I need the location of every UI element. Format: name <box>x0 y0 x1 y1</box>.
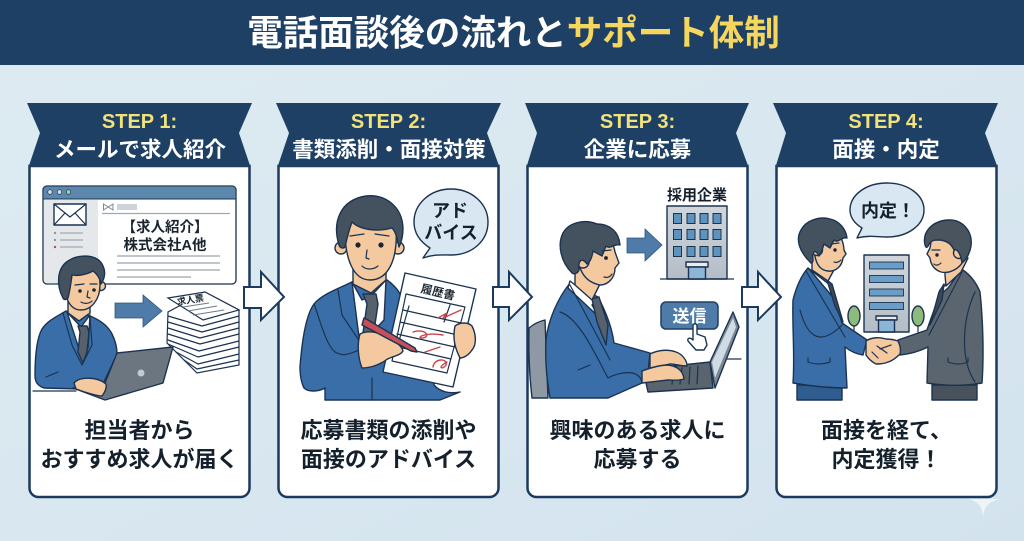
arrow: step 2 to 3 <box>493 272 532 320</box>
arrow: email to documents <box>115 295 162 327</box>
company building: 採用企業 <box>667 186 727 204</box>
caption <box>40 418 239 472</box>
caption <box>549 418 726 472</box>
step 2 banner <box>276 103 501 167</box>
panel: step 1 <box>27 103 252 497</box>
paper stack <box>167 292 239 373</box>
caption: 応募書類の添削や <box>300 418 477 443</box>
step 2 banner: STEP 2: <box>351 111 426 133</box>
person typing <box>546 222 741 398</box>
envelope icon <box>54 204 86 225</box>
office building and trees <box>848 255 924 332</box>
caption: おすすめ求人が届く <box>40 447 239 472</box>
panel: step 4 <box>773 103 998 497</box>
title bar <box>0 0 1024 65</box>
caption: 面接のアドバイス <box>301 447 476 472</box>
speech bubble: advice: バイス <box>424 223 478 243</box>
caption <box>821 418 952 472</box>
email window illustration: 【求人紹介】 <box>122 218 208 236</box>
person left: candidate <box>793 218 867 400</box>
caption: 面接を経て、 <box>821 418 952 443</box>
company building <box>660 186 734 279</box>
panel: step 3 <box>525 103 749 497</box>
laptop <box>73 347 173 400</box>
chair <box>529 320 548 398</box>
speech bubble: job offer: 内定！ <box>861 201 915 221</box>
resume document: 履歴書 <box>420 281 456 303</box>
laptop <box>720 358 741 360</box>
arrow: applicant to company <box>627 229 662 261</box>
resume document <box>383 273 476 387</box>
step 4 banner <box>773 103 998 167</box>
step 1 banner: STEP 1: <box>102 111 177 133</box>
speech bubble: job offer <box>850 183 924 238</box>
paper stack: 求人票 <box>176 292 205 307</box>
step 3 banner <box>525 103 749 167</box>
speech bubble: advice <box>414 189 488 258</box>
caption: 内定獲得！ <box>831 447 942 472</box>
step 4 banner: 面接・内定 <box>832 138 940 162</box>
caption: 興味のある求人に <box>549 418 726 443</box>
step 4 banner: STEP 4: <box>848 111 924 133</box>
step 1 banner <box>27 103 252 167</box>
email window illustration: 株式会社A他 <box>124 237 207 254</box>
arrow: step 1 to 2 <box>244 272 284 320</box>
caption: 担当者から <box>84 418 195 443</box>
send button with cursor <box>661 302 718 350</box>
caption <box>300 418 477 472</box>
arrow: step 3 to 4 <box>742 272 781 320</box>
step 3 banner: 企業に応募 <box>584 138 692 162</box>
caption: 応募する <box>593 447 682 472</box>
step 1 banner: メールで求人紹介 <box>54 138 226 162</box>
person with resume <box>300 196 460 400</box>
send button with cursor: 送信 <box>672 307 706 326</box>
speech bubble: advice: アド <box>432 201 468 221</box>
hands and pen <box>358 318 475 368</box>
sparkle <box>968 499 1000 517</box>
step 3 banner: STEP 3: <box>600 111 675 133</box>
person at laptop <box>33 256 173 400</box>
email window illustration <box>43 186 236 284</box>
title: 電話面談後の流れとサポート体制 <box>247 13 780 53</box>
step 2 banner: 書類添削・面接対策 <box>292 138 486 162</box>
person right: interviewer <box>866 220 983 400</box>
handshake <box>866 338 900 364</box>
panel: step 2 <box>276 103 501 497</box>
